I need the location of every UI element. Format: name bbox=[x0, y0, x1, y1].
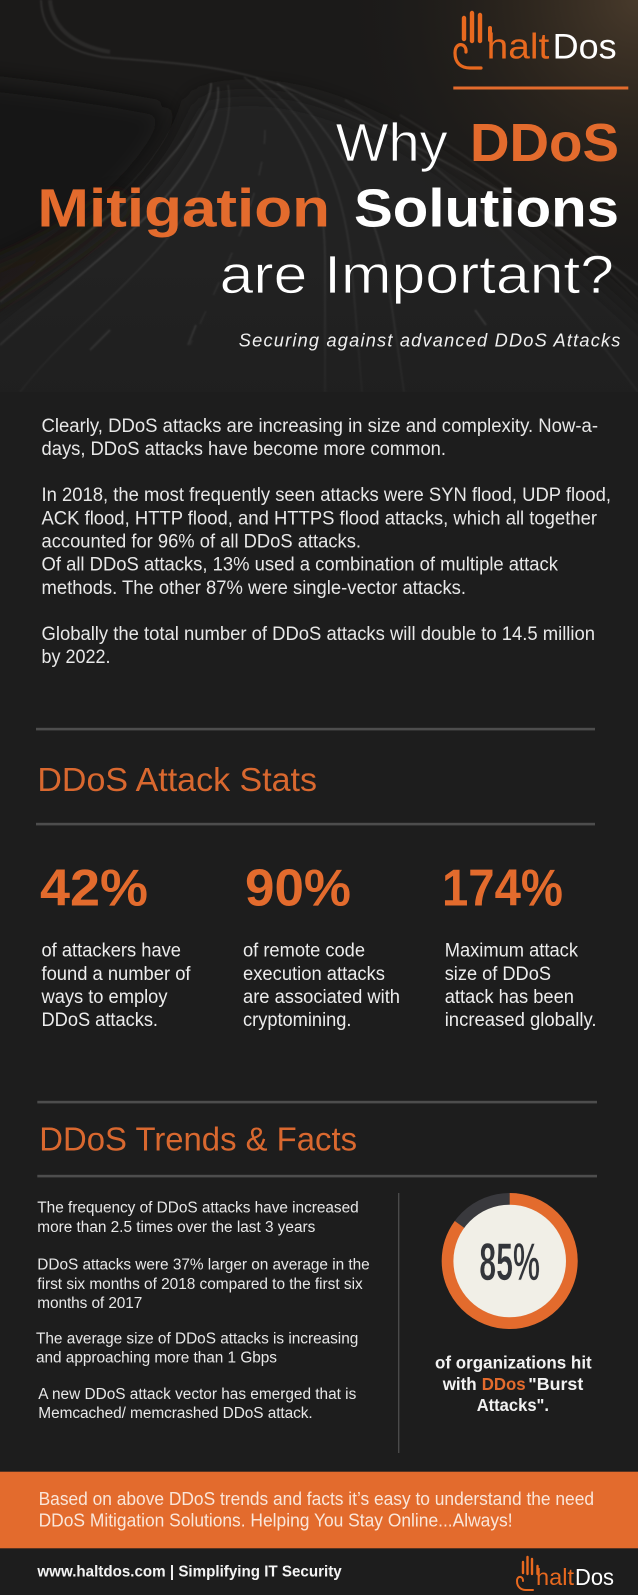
text block: introduction: days, DDoS attacks have become more common. bbox=[42, 439, 446, 460]
title: Solutions bbox=[354, 179, 619, 239]
stat: 90% bbox=[243, 860, 400, 1031]
title: Mitigation bbox=[37, 179, 330, 239]
stat: 90%: of remote code bbox=[243, 941, 365, 962]
stat: 42%: found a number of bbox=[42, 964, 191, 985]
panel: attack stats bbox=[40, 860, 596, 1031]
fact: new vector: A new DDoS attack vector has emerged that is bbox=[38, 1386, 357, 1403]
fact: frequency bbox=[37, 1200, 359, 1236]
heading: DDoS Attack Stats: DDoS Attack Stats bbox=[37, 761, 317, 798]
fact: size growth: first six months of 2018 compared to the first six bbox=[37, 1276, 363, 1293]
footer logo words bbox=[536, 1564, 614, 1590]
subtitle: Securing against advanced DDoS Attacks bbox=[239, 331, 620, 351]
footer logo: haltDos bbox=[517, 1557, 614, 1590]
fact: new vector bbox=[38, 1386, 357, 1422]
text block: introduction bbox=[42, 416, 611, 668]
icon: raised hand small bbox=[517, 1557, 538, 1590]
panel: orange conclusion banner bbox=[0, 1472, 638, 1548]
panel: header with road photo bbox=[0, 0, 638, 390]
stat: 174%: Maximum attack bbox=[445, 941, 578, 962]
footer logo words: Dos bbox=[575, 1564, 614, 1590]
text block: introduction: methods. The other 87% were single-vector attacks. bbox=[42, 578, 466, 599]
text block: trends list bbox=[36, 1200, 370, 1422]
donut caption: Attacks". bbox=[477, 1395, 549, 1415]
stat: 174% bbox=[442, 860, 596, 1031]
fact: size growth: months of 2017 bbox=[37, 1295, 142, 1312]
logo word: Dos: Dos bbox=[553, 28, 617, 66]
donut caption: of organizations hit bbox=[435, 1353, 592, 1373]
logo: haltDos bbox=[455, 13, 617, 68]
stat: 90%: 90% bbox=[245, 860, 351, 918]
stat: 42%: of attackers have bbox=[42, 941, 181, 962]
stat: 90%: cryptomining. bbox=[243, 1010, 352, 1031]
fact: average size: The average size of DDoS attacks is increasing bbox=[36, 1330, 358, 1347]
stat: 174%: size of DDoS bbox=[445, 964, 551, 985]
text block: introduction: Clearly, DDoS attacks are increasing in size and complexity. Now-a- bbox=[42, 416, 598, 437]
text block: introduction: accounted for 96% of all DDoS attacks. bbox=[42, 532, 361, 552]
title: are Important? bbox=[220, 245, 614, 305]
fact: average size: and approaching more than 1 Gbps bbox=[36, 1349, 277, 1366]
donut caption bbox=[435, 1353, 592, 1415]
stat: 42%: ways to employ bbox=[41, 987, 168, 1008]
stat: 42% bbox=[40, 860, 191, 1031]
stat: 174%: attack has been bbox=[445, 987, 574, 1008]
heading: DDoS Trends & Facts: DDoS Trends & Facts bbox=[39, 1121, 357, 1158]
stat: 90%: execution attacks bbox=[243, 964, 385, 985]
fact: frequency: The frequency of DDoS attacks have increased bbox=[37, 1200, 359, 1217]
logo underline bbox=[453, 86, 628, 90]
footer tagline: www.haltdos.com | Simplifying IT Security bbox=[36, 1564, 342, 1581]
panel: orange conclusion banner: Based on above DDoS trends and facts it’s easy to understand the need bbox=[39, 1488, 594, 1509]
donut caption: "Burst bbox=[528, 1374, 583, 1394]
text block: introduction: ACK flood, HTTP flood, and HTTPS flood attacks, which all together bbox=[42, 508, 598, 529]
stat: 174%: 174% bbox=[442, 860, 563, 918]
road photo background bbox=[0, 0, 638, 390]
logo word: halt: halt bbox=[487, 26, 549, 66]
title: Why bbox=[336, 113, 448, 173]
fact: average size bbox=[36, 1330, 358, 1366]
stat: 42%: 42% bbox=[40, 860, 148, 918]
donut caption: DDos bbox=[482, 1374, 526, 1394]
fact: frequency: more than 2.5 times over the last 3 years bbox=[37, 1219, 316, 1236]
title: DDoS bbox=[470, 113, 619, 173]
text block: introduction: by 2022. bbox=[42, 647, 110, 668]
fact: size growth bbox=[37, 1257, 370, 1312]
fact: new vector: Memcached/ memcrashed DDoS attack. bbox=[38, 1405, 313, 1422]
stat: 174%: increased globally. bbox=[445, 1010, 596, 1031]
donut caption: with bbox=[442, 1374, 477, 1394]
text block: introduction: In 2018, the most frequently seen attacks were SYN flood, UDP flood, bbox=[42, 485, 611, 506]
panel: 85% donut bbox=[435, 1199, 592, 1415]
stat: 90%: are associated with bbox=[243, 987, 400, 1008]
donut chart: 85%: 85% bbox=[479, 1233, 540, 1292]
title bbox=[37, 113, 619, 305]
panel: orange conclusion banner: DDoS Mitigation Solutions. Helping You Stay Online...Always! bbox=[39, 1510, 513, 1531]
text block: introduction: Of all DDoS attacks, 13% used a combination of multiple attack bbox=[42, 555, 558, 576]
donut chart: 85% bbox=[448, 1199, 572, 1323]
text block: introduction: Globally the total number of DDoS attacks will double to 14.5 million bbox=[42, 624, 595, 645]
stat: 42%: DDoS attacks. bbox=[42, 1010, 158, 1031]
icon: raised hand bbox=[455, 13, 490, 68]
fact: size growth: DDoS attacks were 37% larger on average in the bbox=[37, 1257, 370, 1274]
footer logo words: halt bbox=[536, 1564, 575, 1590]
